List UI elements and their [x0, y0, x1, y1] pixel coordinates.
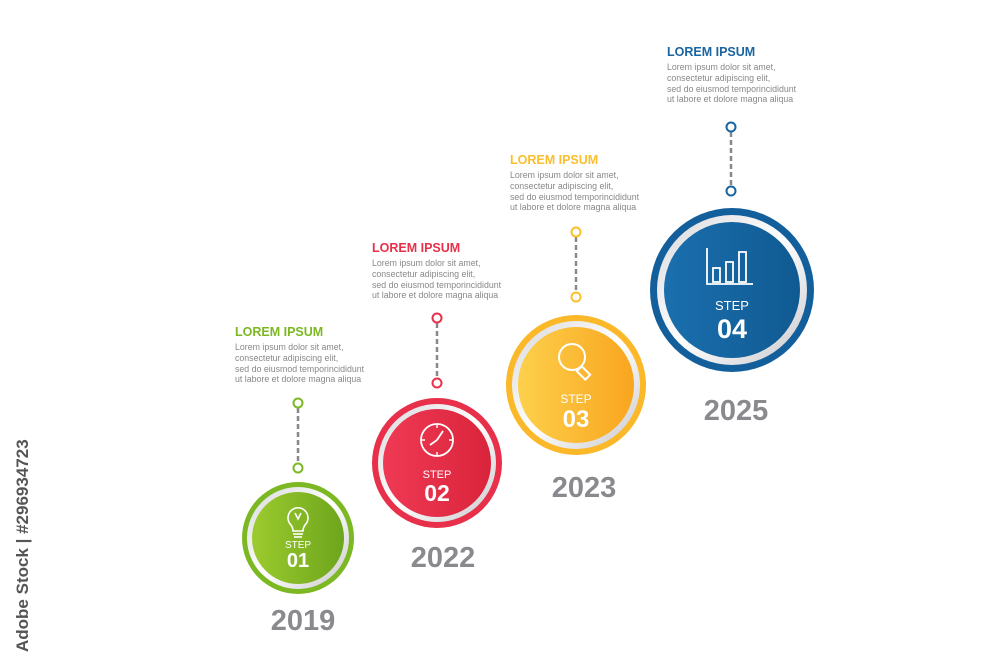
- icon: bar chart: [707, 248, 753, 284]
- text block: step 2: LOREM IPSUM: [372, 241, 460, 255]
- circle: step 3: [506, 315, 646, 455]
- text block: step 1: ut labore et dolore magna aliqua: [235, 374, 361, 384]
- connector: step 1: [294, 398, 302, 472]
- text block: step 2: ut labore et dolore magna aliqua: [372, 290, 498, 300]
- text block: step 3: ut labore et dolore magna aliqua: [510, 202, 636, 212]
- circle: step 4: 04: [717, 314, 747, 344]
- step 1: [235, 325, 365, 637]
- text block: step 3: LOREM IPSUM: [510, 153, 598, 167]
- step 3: [506, 153, 646, 504]
- circle: step 2: 02: [424, 480, 450, 506]
- text block: step 1: consectetur adipiscing elit,: [235, 353, 338, 363]
- text block: step 1: LOREM IPSUM: [235, 325, 323, 339]
- text block: step 3: sed do eiusmod temporincididunt: [510, 192, 640, 202]
- watermark text: Adobe Stock | #296934723: [13, 439, 32, 652]
- text block: step 4: ut labore et dolore magna aliqua: [667, 94, 793, 104]
- icon: magnifier: [559, 344, 590, 380]
- year: 2019: 2019: [271, 605, 335, 637]
- icon: bulb: [288, 508, 308, 537]
- text block: step 2: consectetur adipiscing elit,: [372, 269, 475, 279]
- circle: step 3: 03: [563, 406, 589, 433]
- circle: step 4: [650, 208, 814, 372]
- year: 2023: 2023: [552, 472, 616, 504]
- connector: step 4: [726, 122, 736, 196]
- connector: step 2: [432, 314, 442, 388]
- text block: step 3: consectetur adipiscing elit,: [510, 181, 613, 191]
- circle: step 2: STEP: [423, 469, 451, 481]
- connector: step 3: [572, 228, 580, 302]
- year: 2022: 2022: [411, 542, 475, 574]
- text block: step 3: Lorem ipsum dolor sit amet,: [510, 170, 619, 180]
- circle: step 1: 01: [287, 550, 309, 572]
- circle: step 1: [242, 482, 354, 594]
- circle: step 2: [372, 398, 502, 528]
- text block: step 2: Lorem ipsum dolor sit amet,: [372, 258, 481, 268]
- text block: step 4: Lorem ipsum dolor sit amet,: [667, 62, 776, 72]
- text block: step 1: Lorem ipsum dolor sit amet,: [235, 342, 344, 352]
- text block: step 2: sed do eiusmod temporincididunt: [372, 280, 502, 290]
- text block: step 4: consectetur adipiscing elit,: [667, 73, 770, 83]
- text block: step 4: sed do eiusmod temporincididunt: [667, 84, 797, 94]
- icon: clock: [421, 424, 453, 456]
- circle: step 4: STEP: [715, 298, 749, 313]
- text block: step 2: [372, 241, 502, 300]
- step 2: [372, 241, 502, 574]
- text block: step 4: LOREM IPSUM: [667, 45, 755, 59]
- text block: step 1: sed do eiusmod temporincididunt: [235, 364, 365, 374]
- year: 2025: 2025: [704, 395, 768, 427]
- text block: step 3: [510, 153, 640, 212]
- text block: step 4: [667, 45, 797, 104]
- circle: step 3: STEP: [560, 392, 592, 406]
- circle: step 1: STEP: [285, 540, 311, 551]
- step 4: [650, 45, 814, 427]
- text block: step 1: [235, 325, 365, 384]
